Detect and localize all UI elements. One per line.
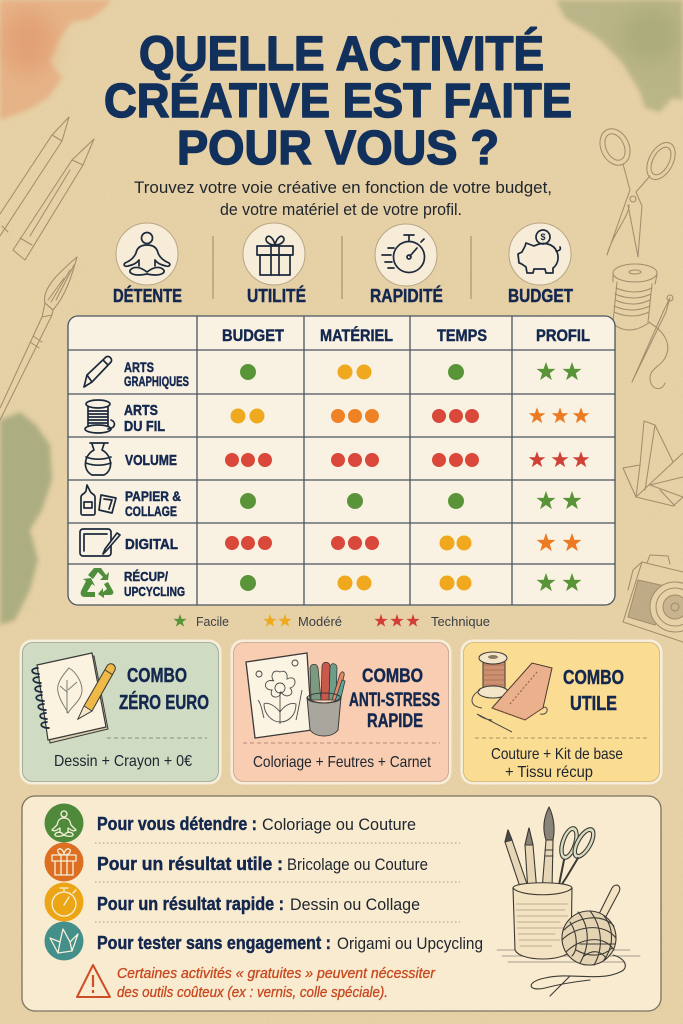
row: tester: Origami ou Upcycling [337,934,483,953]
warning text: Certaines activités « gratuites » peuvent nécessiter [117,966,436,982]
title: CRÉATIVE EST FAITE [104,74,572,128]
title: POUR VOUS ? [177,122,499,175]
title: QUELLE ACTIVITÉ [139,27,544,81]
panel: combo utile: UTILE [570,693,617,715]
legend: Modéré [298,614,342,629]
warning text [117,966,436,1001]
row: papier et collage [81,485,582,519]
panel: combo zéro euro: COMBO [127,665,187,687]
criterion: utilité: UTILITÉ [247,285,306,306]
row: digital: DIGITAL [125,536,178,553]
subtitle [134,178,552,219]
row: récup upcycling: UPCYCLING [124,584,185,599]
row: récup upcycling: RÉCUP/ [124,569,168,584]
icon: spool and fabric [472,652,552,732]
icon: colouring page and felt pens [246,653,345,738]
panel: combo zéro euro: ZÉRO EURO [119,691,209,714]
criterion: détente: DÉTENTE [113,285,182,306]
comparison table [68,316,615,605]
table header: BUDGET [222,327,284,345]
row: arts graphiques: GRAPHIQUES [124,373,189,389]
table frame [68,316,615,605]
row: arts graphiques [84,356,582,389]
decoration: pencils [0,117,94,260]
table header: PROFIL [536,327,590,345]
criteria dividers [213,236,471,299]
criterion: utilité [243,223,306,306]
legend: Technique [431,614,490,629]
row: papier et collage: COLLAGE [125,504,177,519]
row: arts graphiques: ARTS [124,359,154,375]
illustration: pot with tools and yarn [497,807,640,996]
panel: combo utile: COMBO [563,667,624,689]
panel: combo anti-stress rapide: COMBO [362,666,423,687]
row: résultat utile [44,842,428,882]
icon: notebook and pencil [32,653,115,743]
criterion: rapidité: RAPIDITÉ [370,285,443,306]
row: arts du fil: DU FIL [124,418,165,435]
row: digital [80,529,582,556]
criterion: budget: $ [540,232,546,242]
table header: TEMPS [437,327,487,345]
legend: Facile [196,614,229,629]
decoration: origami crane [623,421,683,506]
icon: warning [77,965,110,997]
row: résultat rapide: Pour un résultat rapide : [97,894,284,914]
panel: combo anti-stress rapide: RAPIDE [367,711,423,732]
panel: combo zéro euro [21,641,220,783]
criterion: budget [508,223,573,306]
legend [173,614,490,629]
panel: combo utile [462,641,661,783]
panel: combo anti-stress rapide: Coloriage + Feutres + Carnet [253,754,431,771]
panel: combo utile: Couture + Kit de base [491,746,623,763]
row: détendre [44,804,416,842]
decoration: needle and thread [632,295,673,389]
table grid [68,316,615,605]
row: arts du fil: ARTS [124,402,158,419]
row: détendre: Pour vous détendre : [97,814,257,834]
decoration: camera [623,555,683,642]
row: volume: VOLUME [125,452,177,469]
dotted separators [95,843,460,922]
row: résultat utile: Pour un résultat utile : [97,854,283,874]
criterion: budget: BUDGET [508,286,573,306]
criterion: détente [113,223,182,306]
panel: combo anti-stress rapide: ANTI-STRESS [349,690,440,711]
row: résultat utile: Bricolage ou Couture [287,855,428,874]
watercolor blotches [0,0,683,625]
criterion: rapidité [370,224,443,306]
decoration: thread spool [611,264,657,330]
row: résultat rapide: Dessin ou Collage [290,895,420,914]
row: détendre: Coloriage ou Couture [262,815,416,834]
panel: combo zéro euro: Dessin + Crayon + 0€ [54,753,192,770]
subtitle: de votre matériel et de votre profil. [220,200,462,219]
decoration: paintbrush [0,257,77,420]
warning text: des outils coûteux (ex : vernis, colle spéciale). [117,985,388,1001]
row: tester [44,922,483,960]
panel: combo utile: + Tissu récup [505,764,593,781]
row: résultat rapide [44,882,420,922]
title [104,27,572,175]
table header [222,326,590,345]
panel: combo anti-stress rapide [232,641,450,783]
row: tester: Pour tester sans engagement : [97,933,331,953]
row: papier et collage: PAPIER & [125,489,181,504]
subtitle: Trouvez votre voie créative en fonction de votre budget, [134,178,552,197]
row: volume [85,443,589,475]
panel: recommandations [22,796,661,1011]
row: récup upcycling [81,568,582,599]
table header: MATÉRIEL [320,326,393,345]
decoration: scissors [594,124,681,257]
row: arts du fil [85,400,589,435]
